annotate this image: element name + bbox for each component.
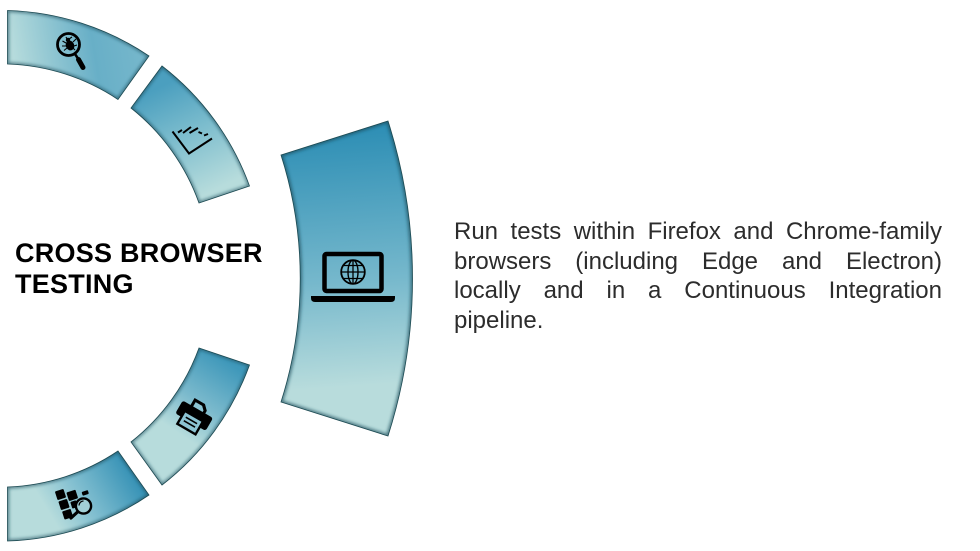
segment: printing — [131, 348, 250, 485]
description text: Run tests within Firefox and Chrome-family — [454, 218, 942, 245]
icon: boxes with magnifier — [55, 489, 91, 520]
icon: printer — [171, 394, 217, 438]
icon: dashboard chart — [172, 127, 212, 154]
title: CROSS BROWSER — [15, 238, 263, 268]
description text: browsers (including Edge and Electron) — [454, 248, 942, 275]
description text — [454, 218, 942, 334]
title — [15, 238, 263, 299]
diagram: arc segments with icons — [7, 10, 413, 542]
segment: cross browser (active) — [281, 121, 413, 436]
segment: debugging — [8, 10, 149, 100]
icon: laptop with globe — [311, 254, 395, 302]
description text: pipeline. — [454, 307, 543, 334]
icon: magnifier with bug — [58, 34, 83, 68]
description text: locally and in a Continuous Integration — [454, 277, 942, 304]
segment: reporting — [131, 66, 250, 203]
title: TESTING — [15, 269, 134, 299]
segment: visual testing — [8, 451, 149, 541]
